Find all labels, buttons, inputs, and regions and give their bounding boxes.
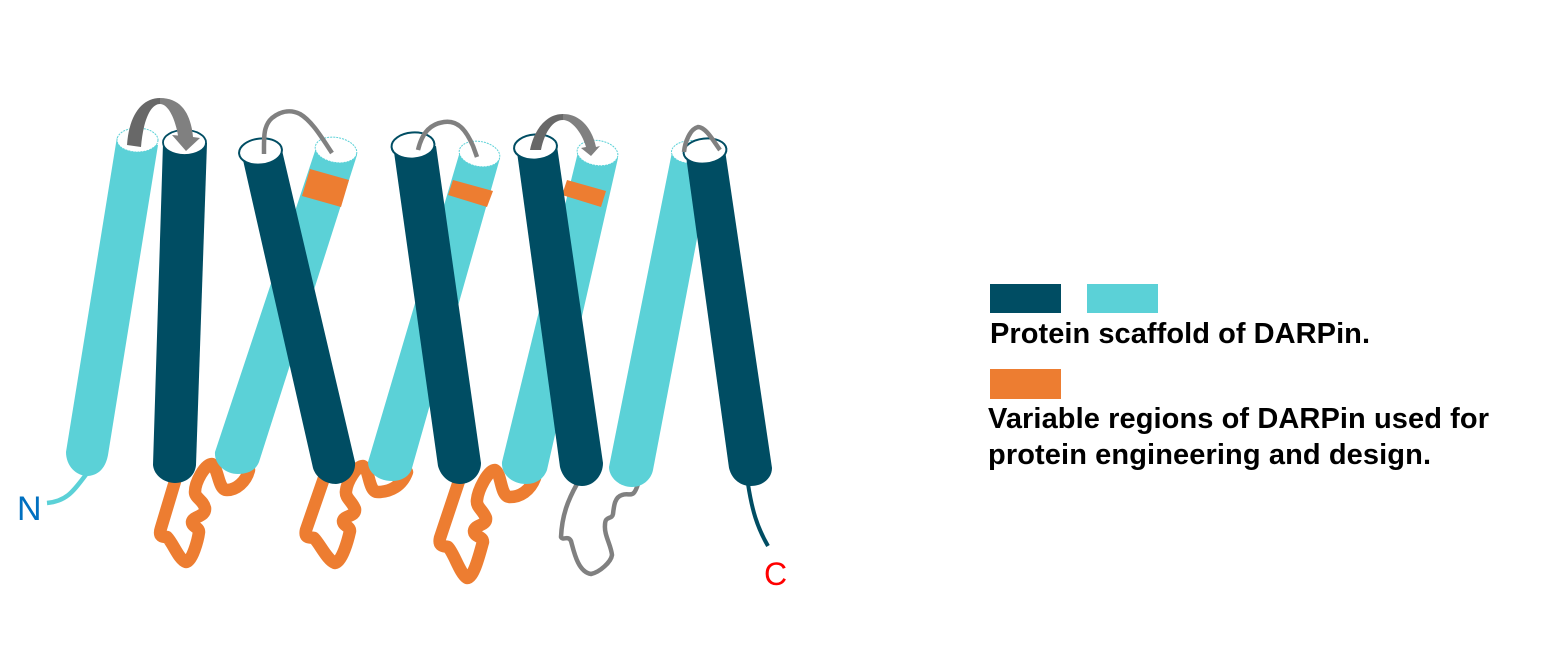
label: C terminus: C — [764, 556, 787, 592]
orange band 2 — [448, 180, 493, 207]
helix 2: dark — [153, 130, 207, 483]
C-terminal tail — [748, 484, 768, 546]
thick gray arrow 1 — [127, 98, 200, 151]
helix 10: dark — [682, 136, 772, 486]
helix 9: cyan — [609, 140, 712, 487]
helix 4: dark — [238, 136, 355, 484]
helix 5: cyan — [368, 138, 502, 481]
thin gray connector 1 — [264, 111, 332, 154]
label: N terminus: N — [17, 490, 42, 528]
helix 3: cyan — [215, 134, 359, 474]
orange band 3 — [562, 180, 606, 207]
legend: variable text: Variable regions of DARPin used for — [988, 403, 1489, 435]
helix 8: dark — [513, 133, 603, 486]
thin gray connector 2 — [418, 122, 477, 157]
legend: scaffold swatch dark — [990, 284, 1061, 313]
orange variable loop 1 — [160, 464, 249, 562]
orange band 1 — [302, 169, 349, 207]
legend: scaffold text: Protein scaffold of DARPin. — [990, 318, 1370, 350]
thin gray connector 3 — [684, 127, 720, 152]
orange variable loop 2 — [306, 466, 407, 563]
legend: variable text: protein engineering and design. — [988, 439, 1431, 471]
N-terminal tail — [47, 472, 88, 503]
helix 7: cyan — [502, 138, 620, 484]
helix 6: dark — [391, 131, 481, 484]
helix 1: cyan — [66, 128, 158, 476]
orange variable loop 3 — [440, 470, 535, 578]
gray loop — [561, 484, 638, 574]
legend: scaffold swatch cyan — [1087, 284, 1158, 313]
thick gray arrow 2 — [530, 114, 600, 156]
legend: variable swatch orange — [990, 369, 1061, 399]
